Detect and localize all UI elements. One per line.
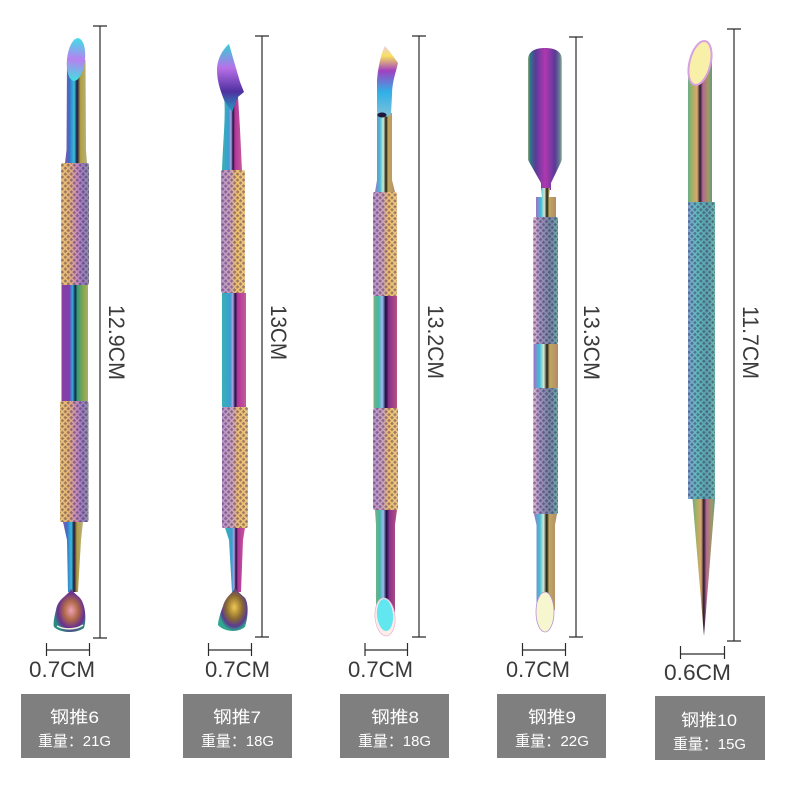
dimension: 12.9CM bbox=[93, 26, 129, 638]
width: 0.7CM tool 9 bbox=[506, 643, 570, 682]
label box: 钢推8: 重量：18G bbox=[358, 733, 431, 750]
label box: 钢推10: 钢推10 bbox=[681, 711, 737, 730]
dimension: 13CM bbox=[255, 36, 291, 637]
width: 0.7CM tool 6 bbox=[29, 643, 95, 682]
knurled handle upper bbox=[373, 192, 397, 296]
width: 0.7CM tool 6: 0.7CM bbox=[29, 657, 95, 682]
lower shaft bbox=[534, 514, 557, 610]
notch bbox=[378, 112, 386, 118]
upper shaft bbox=[65, 60, 87, 163]
dimension: 13.3CM: 13.3CM bbox=[579, 305, 604, 380]
dimension: 11.7CM: 11.7CM bbox=[738, 306, 763, 379]
dimension: 11.7CM bbox=[727, 29, 763, 641]
label box: 钢推6: 钢推6 bbox=[50, 708, 99, 727]
label box: 钢推7: 重量：18G bbox=[201, 733, 274, 750]
upper shaft bbox=[375, 113, 395, 192]
label box: 钢推6: 重量：21G bbox=[38, 733, 111, 750]
spoon bbox=[218, 588, 248, 631]
dimension: 13CM: 13CM bbox=[266, 305, 291, 360]
middle bar bbox=[534, 344, 558, 388]
width: 0.7CM tool 7 bbox=[205, 643, 270, 682]
label box: 钢推8: 钢推8 bbox=[371, 708, 419, 727]
label box: 钢推7: 钢推7 bbox=[213, 708, 261, 727]
tool 6 bbox=[54, 37, 89, 632]
oval tip bbox=[373, 597, 397, 637]
blade bbox=[217, 44, 244, 112]
middle bar bbox=[222, 293, 246, 407]
knurled handle upper bbox=[61, 163, 89, 285]
lower shaft bbox=[63, 522, 83, 592]
label box: 钢推10: 重量：15G bbox=[673, 736, 746, 753]
width: 0.6CM tool 10 bbox=[664, 646, 731, 685]
neck bbox=[222, 96, 242, 170]
tool 7 bbox=[217, 44, 248, 631]
width: 0.7CM tool 8: 0.7CM bbox=[348, 657, 413, 682]
middle bar bbox=[62, 285, 88, 401]
knurled handle bbox=[688, 202, 715, 499]
tool 9 bbox=[528, 48, 562, 632]
dimension: 13.3CM bbox=[569, 37, 604, 637]
lower shaft bbox=[375, 510, 397, 612]
label box: 钢推8 bbox=[340, 694, 449, 758]
label box: 钢推10 bbox=[655, 696, 765, 760]
knurled handle lower bbox=[533, 388, 558, 514]
dimension: 13.2CM bbox=[412, 36, 448, 637]
middle bar bbox=[374, 296, 397, 408]
knurled handle lower bbox=[222, 407, 248, 528]
dimension: 12.9CM: 12.9CM bbox=[104, 305, 129, 380]
spatula bbox=[528, 48, 562, 190]
hooked blade bbox=[377, 46, 398, 117]
label box: 钢推7 bbox=[183, 694, 292, 758]
knurled handle lower bbox=[60, 401, 88, 522]
width: 0.6CM tool 10: 0.6CM bbox=[664, 660, 731, 685]
oval tip bbox=[65, 37, 87, 82]
oval end bbox=[684, 39, 716, 87]
oval tip bbox=[536, 592, 554, 632]
tool 8 bbox=[373, 46, 398, 637]
tool 10 bbox=[684, 39, 716, 636]
label box: 钢推6 bbox=[21, 694, 130, 758]
width: 0.7CM tool 9: 0.7CM bbox=[506, 657, 570, 682]
label box: 钢推9: 重量：22G bbox=[515, 733, 589, 750]
knurled handle upper bbox=[533, 217, 558, 344]
label box: 钢推9: 钢推9 bbox=[528, 708, 576, 727]
spoon bbox=[54, 589, 85, 632]
knurled handle lower bbox=[373, 408, 398, 510]
upper shaft bbox=[688, 50, 712, 202]
width: 0.7CM tool 7: 0.7CM bbox=[205, 657, 270, 682]
label box: 钢推9 bbox=[497, 694, 606, 758]
pointed cone bbox=[692, 499, 715, 636]
knurled handle upper bbox=[221, 170, 245, 293]
dimension: 13.2CM: 13.2CM bbox=[423, 305, 448, 379]
width: 0.7CM tool 8 bbox=[348, 643, 413, 682]
lower shaft bbox=[225, 528, 245, 592]
neck bbox=[536, 188, 556, 217]
